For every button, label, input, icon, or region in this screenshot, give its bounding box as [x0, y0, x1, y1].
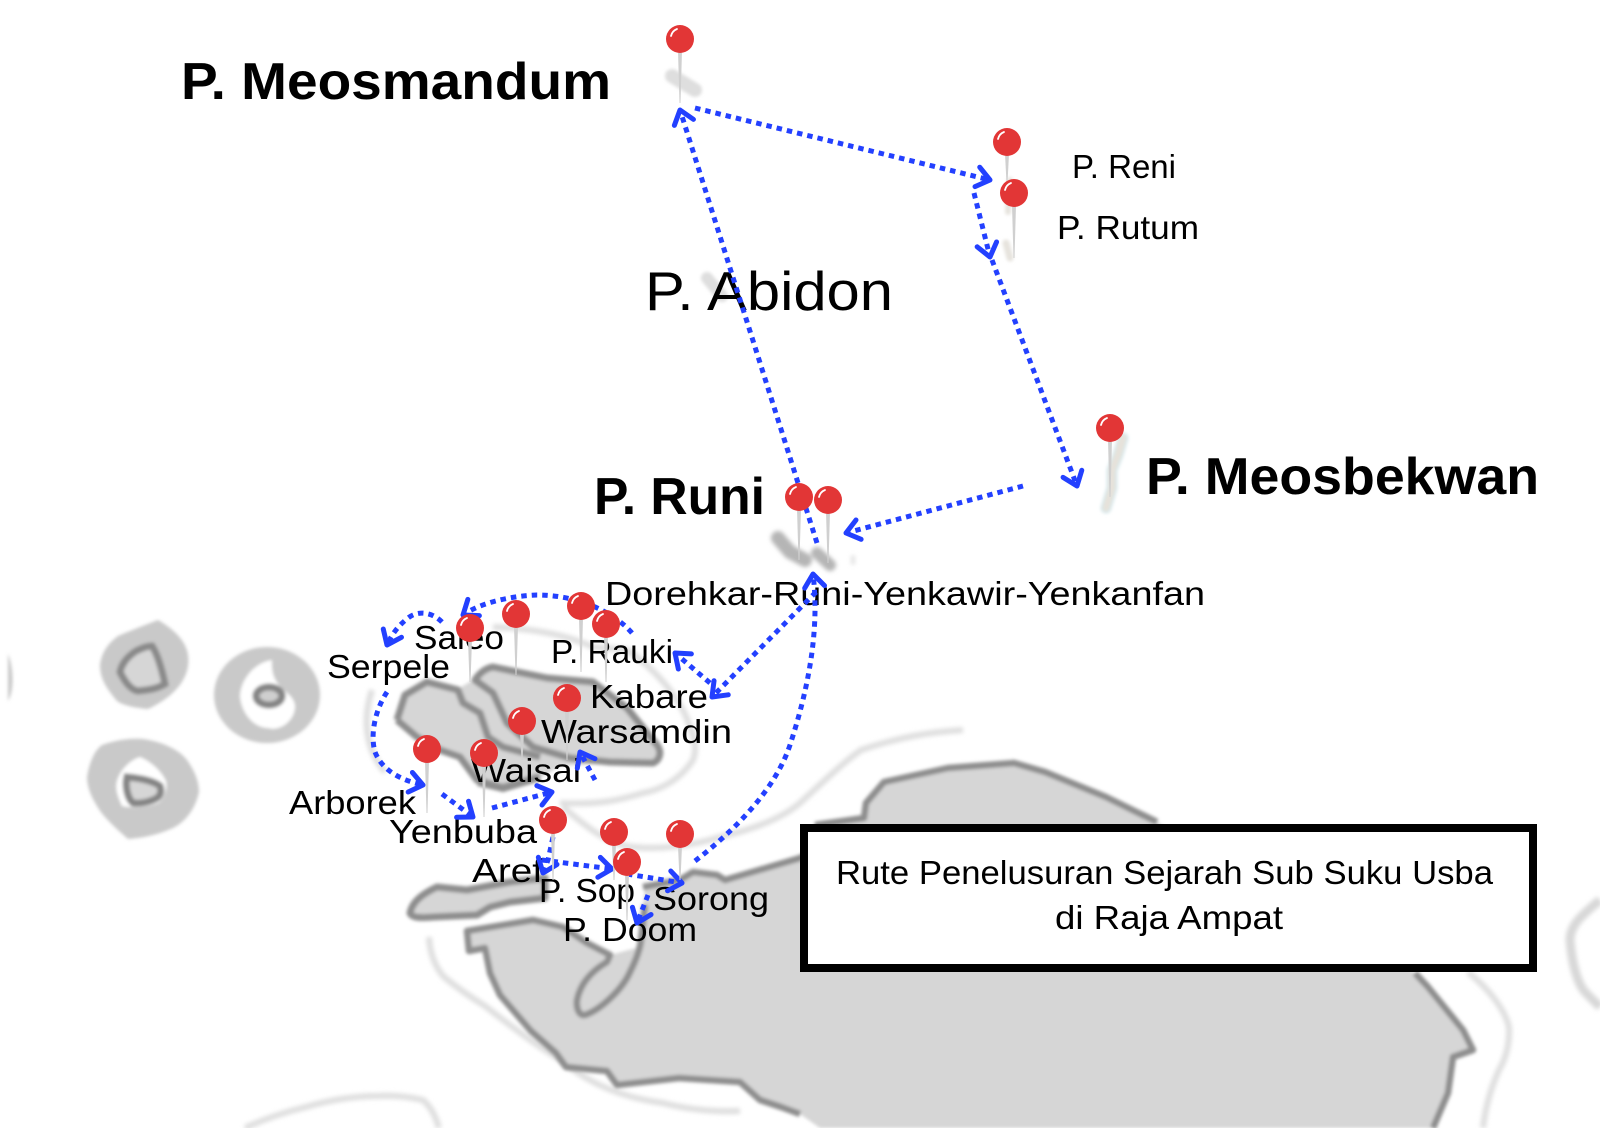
label: Aref: Aref [472, 852, 544, 889]
label: P. Doom: P. Doom [563, 911, 697, 948]
mainland Sorong / Papua [467, 763, 1473, 1128]
label: Arborek: Arborek [289, 784, 417, 821]
halos: shallow-water outlines [245, 627, 1600, 1128]
arrow: Serpele to Arborek [373, 692, 423, 785]
arrow: Rutum to Meosbekwan [992, 260, 1077, 486]
pin: P. Runi west [785, 483, 813, 560]
west peninsula bar [410, 878, 545, 918]
arrow: Yenbuba to Waisai [492, 792, 552, 808]
pin: P. Runi east [814, 486, 842, 563]
arrow: Runi to Meosmandum [680, 110, 817, 543]
pin: Saleo [456, 614, 484, 682]
pin: P. Meosmandum [666, 25, 694, 103]
arrow: Saleo to Serpele [387, 613, 442, 645]
pin: P. Rutum [1000, 179, 1028, 258]
label: P. Abidon: P. Abidon [645, 260, 893, 322]
label: Yenbuba: Yenbuba [389, 813, 538, 850]
arrow: Kabare to Rauki [675, 653, 710, 683]
arrow: Meosmandum to Reni [695, 108, 990, 180]
pin: P. Reni [993, 128, 1021, 183]
arrow: Sop to Sorong [627, 874, 682, 883]
pin: Arborek [413, 735, 441, 813]
label: Saleo: Saleo [414, 619, 504, 656]
location pins [413, 25, 1124, 920]
pin: Dorehkar [567, 592, 595, 672]
atoll: centre [214, 647, 320, 743]
small island: P. Abidon [707, 278, 722, 296]
pin: Sorong [666, 820, 694, 880]
atoll: north-west [100, 620, 188, 709]
arrow: Sop to Doom [637, 895, 648, 923]
pin: Warsamdin [508, 707, 536, 760]
arrow: Meosbekwan to Runi [846, 486, 1023, 533]
label: P. Reni: P. Reni [1072, 148, 1176, 185]
arrow: Rauki to Saleo [463, 595, 632, 633]
label: Warsamdin: Warsamdin [541, 713, 732, 750]
pin: P. Doom [613, 848, 641, 920]
label: Dorehkar-Runi-Yenkawir-Yenkanfan: Dorehkar-Runi-Yenkawir-Yenkanfan [605, 575, 1205, 612]
heading: P. Meosmandum: P. Meosmandum [181, 53, 611, 111]
arrow: Aref down [543, 837, 553, 873]
arrow: Aref to Sop [542, 860, 612, 869]
pin: Serpele [502, 600, 530, 675]
arrow: Runi to Kabare [712, 592, 816, 697]
label: P. Rutum: P. Rutum [1057, 209, 1199, 246]
label: P. Rauki: P. Rauki [551, 633, 673, 670]
pin: P. Rauki [592, 610, 620, 682]
heading: P. Meosbekwan: P. Meosbekwan [1146, 448, 1539, 506]
pin: P. Meosbekwan [1096, 414, 1124, 497]
arrow: Reni to Rutum [974, 193, 990, 257]
island: P. Runi [778, 538, 853, 565]
title box [804, 828, 1533, 968]
place labels [181, 53, 1539, 948]
label: Serpele: Serpele [327, 648, 450, 685]
route arrows [373, 108, 1077, 923]
arrow: Waisai to Warsamdin [580, 752, 595, 780]
title line 2: di Raja Ampat [1055, 899, 1283, 936]
main islands near Waisai [397, 667, 660, 788]
heading: P. Runi: P. Runi [594, 468, 765, 526]
pin: Waisai [470, 739, 498, 817]
label: Kabare: Kabare [590, 678, 708, 715]
pin: Kabare [553, 684, 581, 760]
label: Sorong: Sorong [653, 880, 769, 917]
title line 1: Rute Penelusuran Sejarah Sub Suku Usba [836, 854, 1494, 891]
arrow: Arborek to Yenbuba [442, 794, 473, 817]
arrow: Sorong to Runi [695, 574, 815, 861]
small islands: P. Reni and P. Rutum [1006, 180, 1010, 258]
label: P. Sop: P. Sop [539, 872, 635, 909]
label: Waisai: Waisai [471, 752, 581, 789]
island: P. Meosbekwan [1106, 438, 1123, 508]
small island: P. Meosmandum [672, 76, 695, 90]
pin: P. Sop [600, 818, 628, 880]
island fragment at left edge [8, 654, 13, 701]
pin: Aref [539, 806, 567, 880]
atoll: south-west [87, 739, 199, 839]
